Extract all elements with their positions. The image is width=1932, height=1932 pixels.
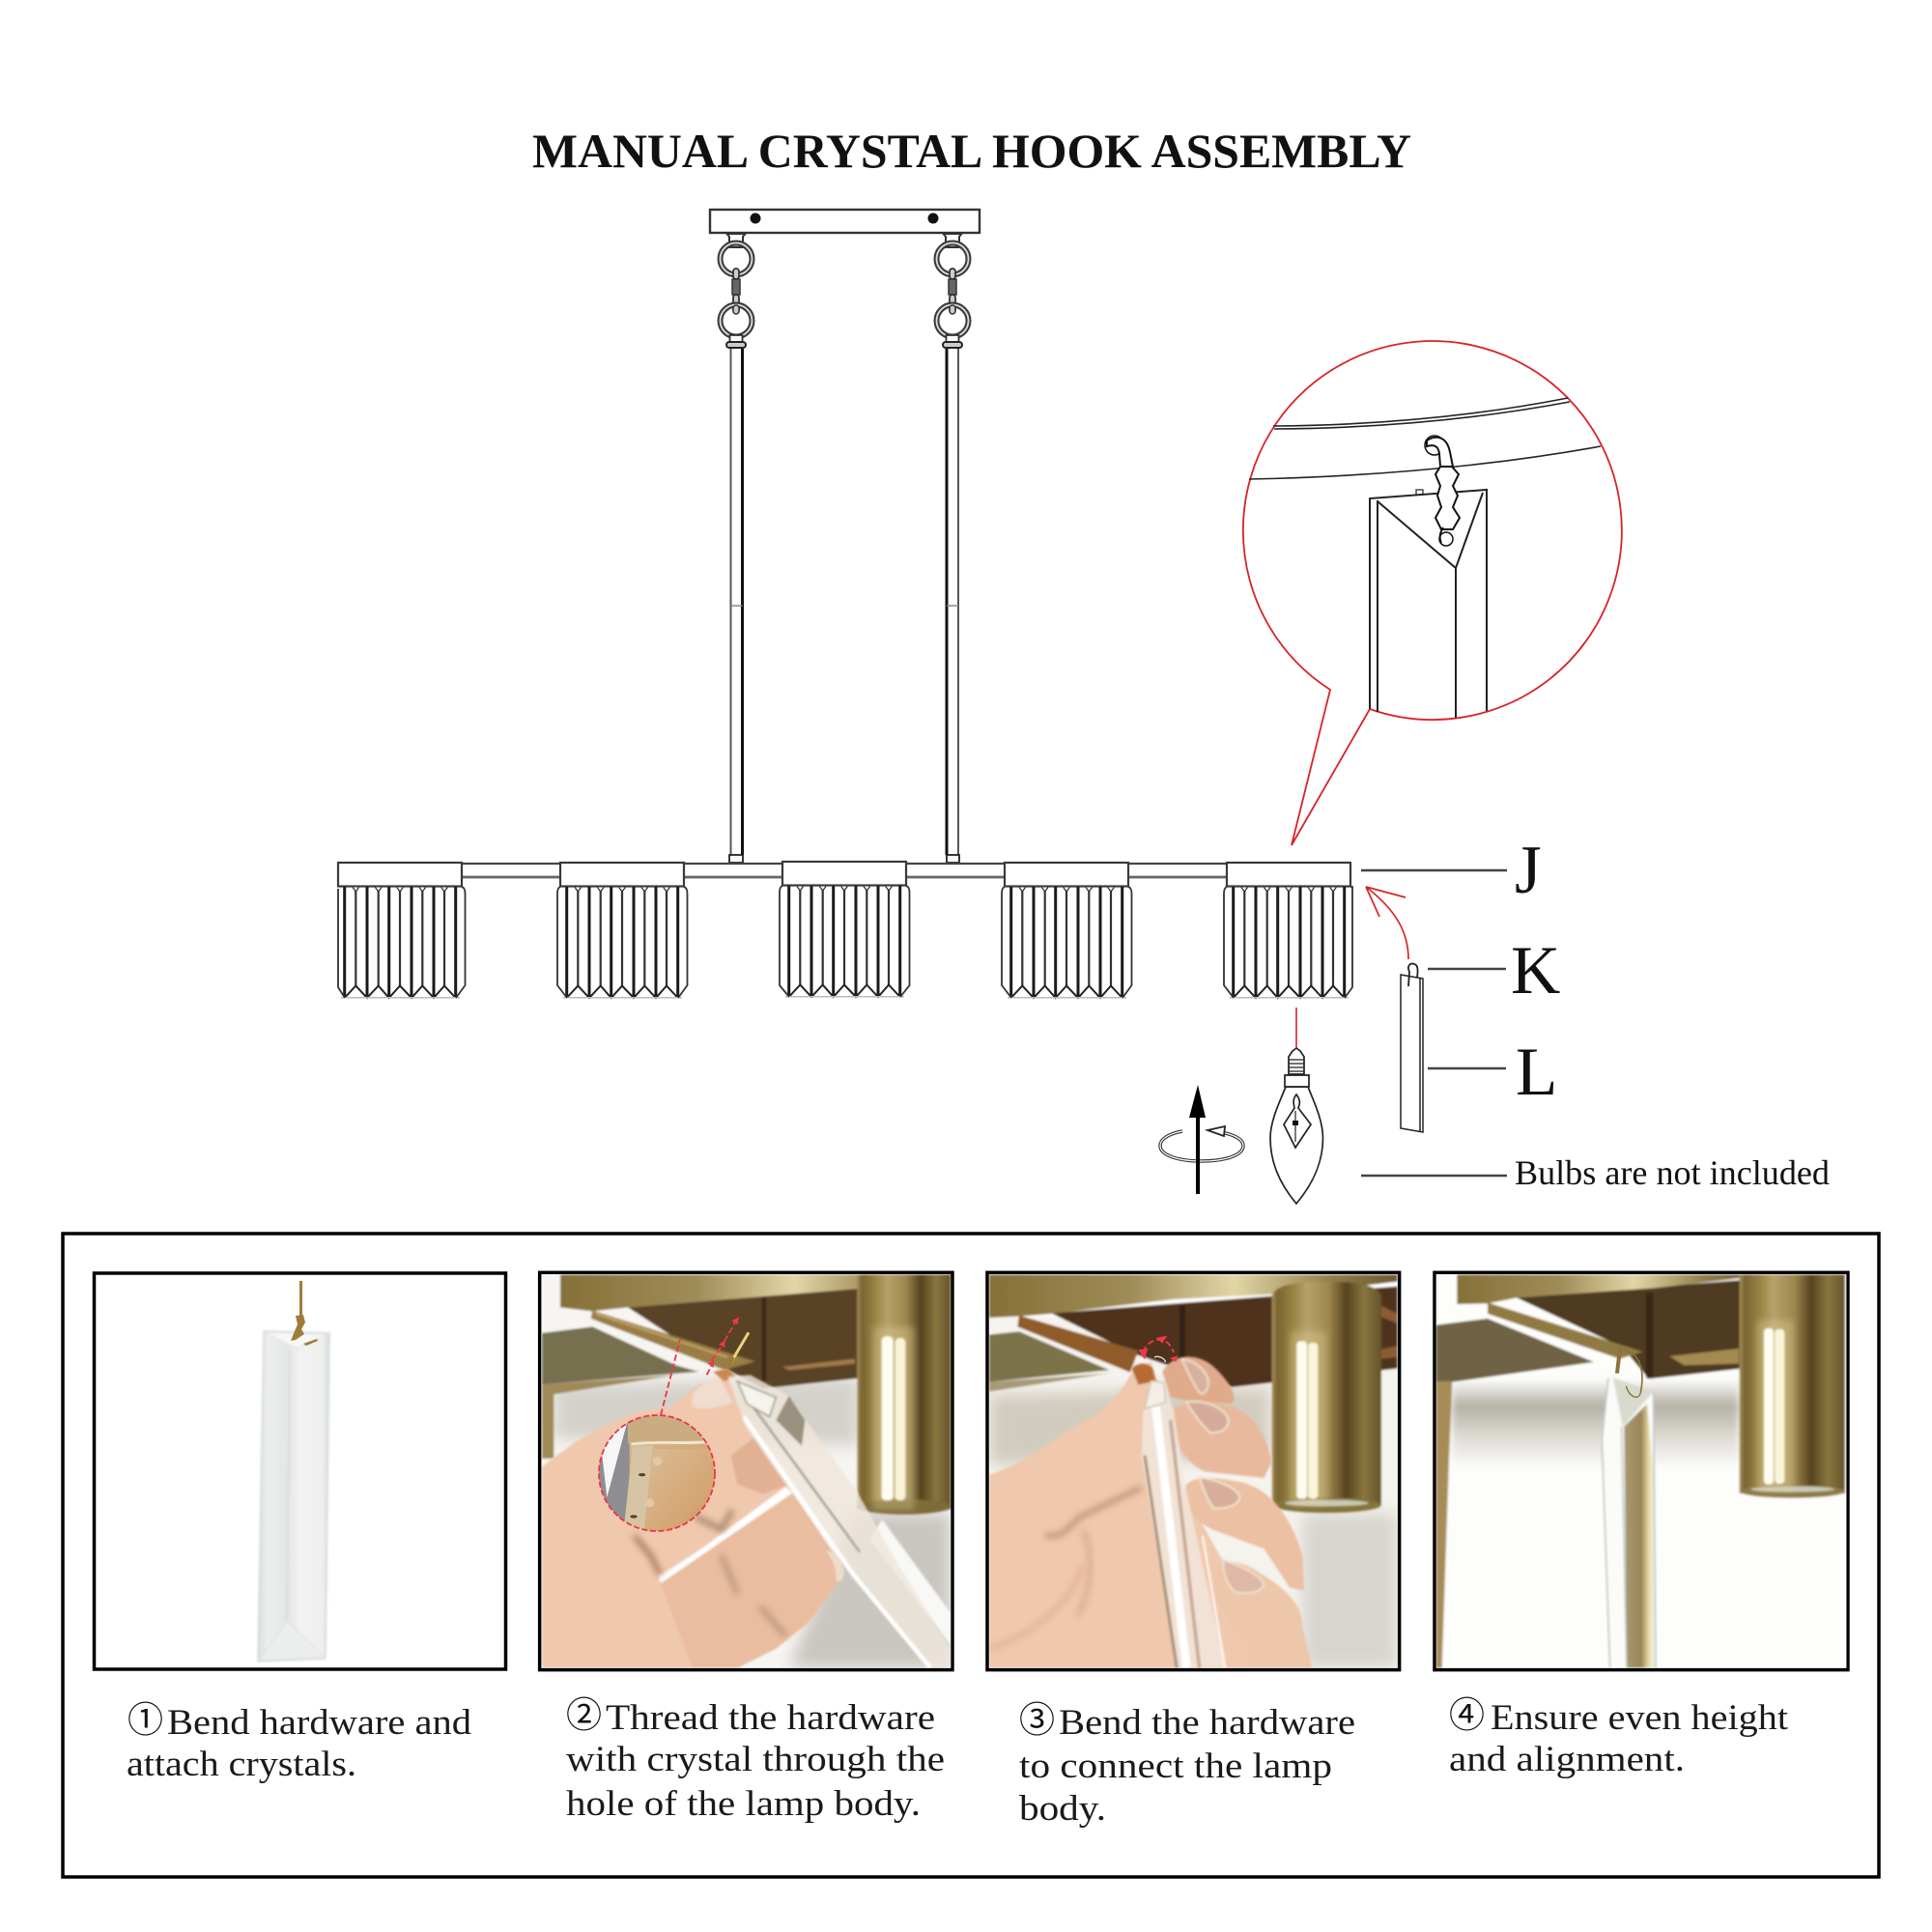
label L with leader: L [1516,1035,1557,1110]
icon: light bulb [1270,1048,1323,1204]
label J with leader: J [1515,833,1542,908]
caption: step 3: ③ [1019,1690,1055,1743]
red arrow: crystal to shade [1366,887,1408,959]
caption: step 4: ④ [1449,1686,1485,1738]
photo scene: lamp body and bracket [542,1274,952,1668]
caption: step 1: attach crystals. [127,1745,356,1784]
fingers [1162,1357,1235,1404]
caption: step 3: Bend the hardware [1059,1703,1355,1743]
note: bulbs are not included: Bulbs are not included [1515,1153,1830,1192]
caption: step 3: body. [1019,1789,1106,1829]
red bend marks [1138,1336,1178,1362]
cylinder lamp [1740,1274,1845,1493]
lamp body edges [1249,398,1601,479]
inset zoom circle [597,1413,718,1536]
photo scene: lamp body and bracket [1436,1274,1847,1668]
caption: step 3 [1019,1690,1355,1829]
panel: instruction steps frame [63,1234,1879,1877]
hook [1425,436,1460,546]
panel: step 1 crystal photo [95,1273,506,1669]
cylinder lamp [857,1274,951,1510]
caption: step 2: hole of the lamp body. [566,1784,921,1824]
caption: step 1: ① [128,1690,163,1743]
red line to bulb [1295,1008,1297,1050]
caption: step 2: Thread the hardware [606,1698,935,1738]
canopy [710,210,980,233]
chandelier line drawing [338,210,1352,998]
panel: step 4 hanging crystal photo [1435,1272,1848,1670]
caption: step 2: ② [566,1686,602,1738]
crystal shade 5 [1224,863,1352,998]
label K with leader: K [1511,933,1560,1009]
panel: step 3 bending photo [987,1272,1400,1670]
crystal in callout [1370,490,1487,718]
caption: step 3: to connect the lamp [1019,1747,1332,1786]
panel: step 2 threading photo [540,1272,952,1670]
cylinder lamp [1272,1282,1381,1505]
right chain and rod [937,234,968,863]
label K with leader [1428,933,1560,1009]
left chain and rod [721,234,752,863]
caption: step 2: with crystal through the [566,1740,945,1779]
crystal shade 4 [1002,863,1132,998]
red dashed guides [661,1319,737,1415]
caption: step 1: Bend hardware and [167,1703,472,1743]
caption: step 4: Ensure even height [1491,1698,1789,1738]
photo scene: lamp body and bracket [989,1274,1398,1668]
gold pin [728,1332,749,1367]
caption: step 1 [127,1690,472,1784]
caption: step 4 [1449,1686,1789,1779]
photo scene: hand and fingers [989,1357,1312,1668]
caption: step 4: and alignment. [1449,1740,1685,1779]
hardware pin [291,1281,318,1346]
crystal shade 1 [338,863,466,998]
crystal held in fingers [727,1375,951,1668]
photo scene: hand [542,1369,844,1668]
crystal shade 2 [557,863,688,998]
brass hook ring [1617,1346,1642,1397]
crystal part L with hook K [1401,963,1423,1132]
crystal [258,1331,329,1662]
label L with leader [1428,1035,1557,1110]
crystal rod [1142,1379,1225,1668]
crystal shade 3 [780,862,910,997]
callout: magnified crystal hook [1243,341,1622,845]
horizontal arm [462,863,1227,865]
caption: step 2 [566,1686,945,1824]
icon: screw-in direction arrow [1160,1085,1243,1194]
hanging crystal [1602,1378,1656,1668]
title: MANUAL CRYSTAL HOOK ASSEMBLY [532,124,1411,178]
